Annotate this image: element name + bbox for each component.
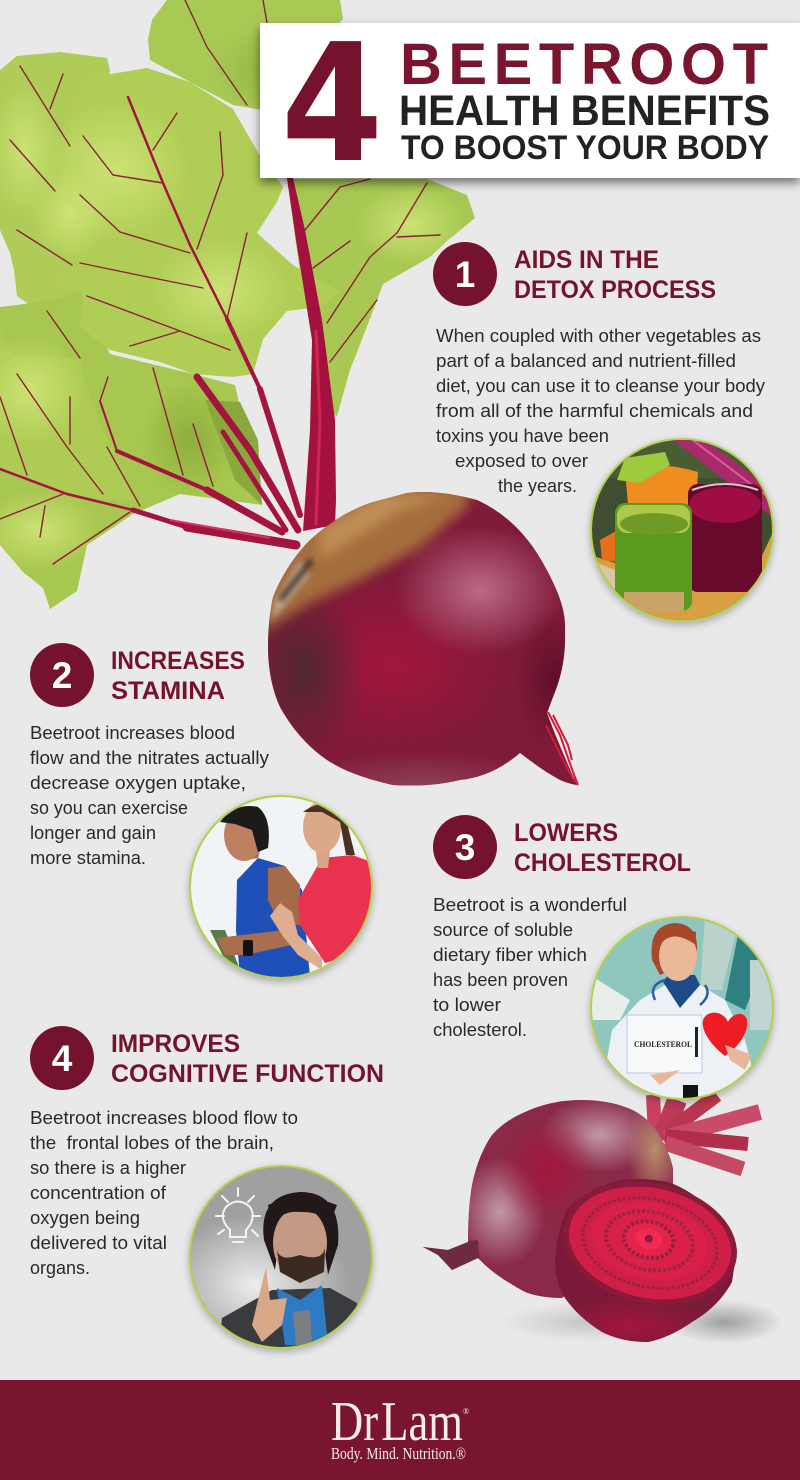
number badge 4 [30, 1026, 94, 1090]
body text 4: delivered to vital [30, 1232, 167, 1253]
stems [653, 1095, 760, 1169]
heading 2: INCREASES [111, 647, 245, 675]
footer band [0, 1380, 800, 1480]
title banner [260, 9, 800, 199]
body text 2: flow and the nitrates actually [30, 747, 270, 768]
thin leaf ribs [128, 97, 227, 319]
title line 1: BEETROOT [400, 32, 768, 97]
number badge 2: 2 [52, 655, 72, 696]
body text 1: exposed to over [455, 450, 588, 471]
title number: 4 [281, 9, 383, 199]
number badge 1: 1 [455, 254, 475, 295]
halved beet [555, 1179, 737, 1342]
logo wordmark: Dr Lam [331, 1391, 463, 1453]
body text 3: source of soluble [433, 919, 573, 940]
stalks [0, 178, 336, 545]
leaf shading [0, 20, 465, 570]
body text 1: When coupled with other vegetables as [436, 325, 761, 346]
title line 3: TO BOOST YOUR BODY [401, 129, 769, 167]
body text 3: has been proven [433, 969, 568, 990]
whole beet [423, 1100, 673, 1298]
photo: runners [189, 795, 373, 979]
body text 3: Beetroot is a wonderful [433, 894, 627, 915]
small inner leaf [205, 400, 262, 505]
root hairs [546, 712, 578, 785]
leaf: upper left [0, 52, 110, 305]
body text 1: from all of the harmful chemicals and [436, 400, 753, 421]
illustration: beetroot with leaves [0, 0, 595, 820]
photo: doctor: CHOLESTEROL [634, 1039, 692, 1049]
leaf: right [287, 179, 475, 416]
section 4: cognitive function [30, 1026, 384, 1355]
photo: thinking man [160, 1165, 373, 1355]
body text 3: dietary fiber which [433, 944, 587, 965]
heading 1: AIDS IN THE [514, 246, 659, 274]
photo: juices [590, 436, 774, 622]
body text 4: the frontal lobes of the brain, [30, 1132, 274, 1153]
illustration: whole and halved beet [420, 1095, 783, 1353]
body text 1: the years. [498, 475, 577, 496]
heading 1: DETOX PROCESS [514, 276, 716, 304]
number badge 3: 3 [455, 827, 475, 868]
body text 2: so you can exercise [30, 797, 188, 818]
registered mark: ® [463, 1407, 469, 1416]
leaf: main [40, 68, 340, 377]
veins [0, 0, 440, 564]
body text 3: cholesterol. [433, 1019, 527, 1040]
body text 2: decrease oxygen uptake, [30, 772, 246, 793]
body text 1: diet, you can use it to cleanse your body [436, 375, 766, 396]
cut face [551, 1166, 749, 1320]
photo: doctor [590, 916, 774, 1100]
body text 4: Beetroot increases blood flow to [30, 1107, 298, 1128]
body text 1: part of a balanced and nutrient-filled [436, 350, 736, 371]
leaf: lower left [0, 292, 262, 609]
heading 2: STAMINA [111, 677, 225, 705]
section 1: detox [433, 242, 774, 622]
section 2: stamina [30, 643, 373, 979]
logo tagline: Body. Mind. Nutrition.® [331, 1444, 466, 1463]
beet root [268, 492, 577, 786]
title line 2: HEALTH BENEFITS [399, 87, 770, 135]
body text 2: more stamina. [30, 847, 146, 868]
body text 2: Beetroot increases blood [30, 722, 235, 743]
heading 3: CHOLESTEROL [514, 849, 691, 877]
leaf: top [148, 0, 343, 110]
number badge 1 [433, 242, 497, 306]
heading 3: LOWERS [514, 819, 618, 847]
number badge 2 [30, 643, 94, 707]
body text 4: so there is a higher [30, 1157, 186, 1178]
heading 4: COGNITIVE FUNCTION [111, 1060, 384, 1088]
heading 4: IMPROVES [111, 1030, 240, 1058]
body text 4: concentration of [30, 1182, 167, 1203]
body text 1: toxins you have been [436, 425, 609, 446]
light bulb icon [216, 1188, 260, 1242]
body text 4: oxygen being [30, 1207, 140, 1228]
number badge 4: 4 [52, 1038, 73, 1079]
body text 3: to lower [433, 994, 501, 1015]
body text 2: longer and gain [30, 822, 156, 843]
number badge 3 [433, 815, 497, 879]
body text 4: organs. [30, 1257, 90, 1278]
section 3: cholesterol [433, 815, 774, 1100]
ground shadow [500, 1300, 783, 1344]
leaf: front lower [0, 330, 137, 502]
